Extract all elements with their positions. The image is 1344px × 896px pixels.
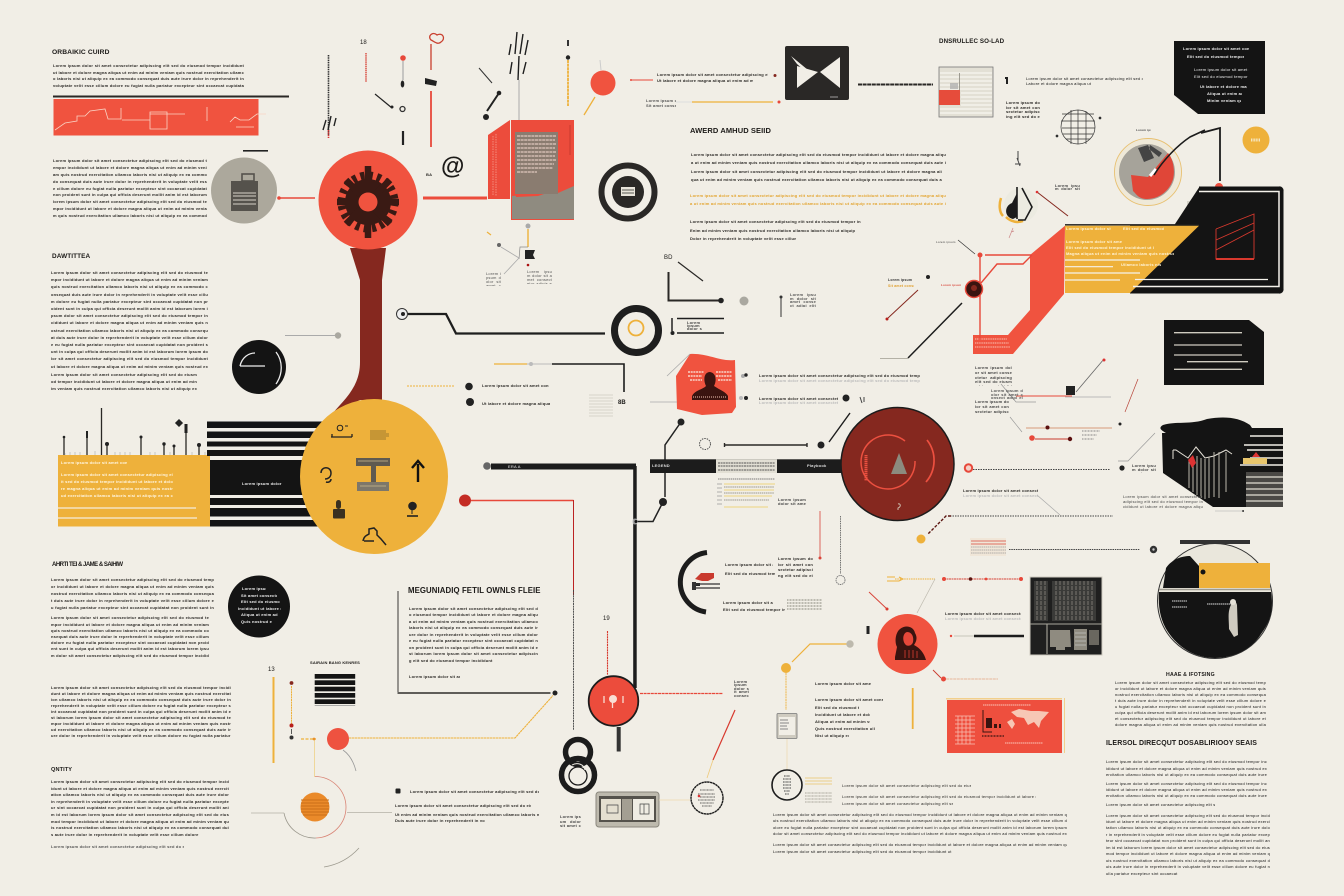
band labels: Playbook [807, 463, 826, 468]
band labels [652, 463, 826, 468]
dark red dial [841, 408, 954, 520]
leader lines to envelope [630, 74, 780, 104]
connector black bus line [483, 462, 637, 688]
scatter captions [975, 366, 1023, 414]
yellow panel text [61, 460, 173, 498]
heading: top left: ORBAIKIC CUIRD [52, 48, 110, 56]
heading: inset caption: HAAE & IFOTSING [1166, 672, 1215, 678]
device panel [596, 792, 659, 827]
small number label: 13 [268, 666, 275, 672]
envelope icon [785, 46, 849, 100]
heading: third section: AHRTI TEI & JAME & SAIHIW [52, 562, 123, 568]
text block: fourth column: Lorem ipsum dolor sit amet consectetur adipiscing elit sed do eiusmod tempor incididunt ut labore et dolore magna aliqua ut enim ad minim veniam quis nostrud exercitation ullamco laboris nisi ut aliquip ex ea commodo consequat duis aute irure dolor in reprehenderit in voluptate velit esse cillum dolore eu fugiat nulla pariatur excepteur sint occaecat cupidatat non proident sunt in culpa qui officia deserunt mollit anim id est laborum lorem ipsum dolor sit amet consectetur adipiscing elit sed do eiusmod tempor incididunt ut labore et dolore magna aliqua ut enim ad minim veniam quis nostrud exercitation ullamco laboris nisi ut aliquip ex ea commodo consequat duis aute irure dolor in reprehenderit in voluptate velit esse cillum dolore eu fugiat nulla pariatur [51, 685, 231, 738]
dashed verticals [818, 511, 845, 584]
heading: bottom right: ILERSOL DIRECQUT DOSABLIRIOOY SEAIS [1106, 740, 1257, 747]
number label bottom: 19 [603, 616, 610, 622]
leader captions [646, 72, 768, 108]
yellow riser text [815, 681, 883, 738]
notched stripe panel [1164, 320, 1264, 385]
red map card [946, 698, 1065, 753]
black band with light panel [650, 459, 844, 473]
portrait side marks [868, 626, 1024, 729]
bottom middle caption lines [842, 783, 1036, 806]
black disc caption [238, 586, 281, 624]
black elbow and node [1201, 128, 1223, 191]
connector red line [459, 494, 574, 730]
red book block [488, 120, 574, 220]
heading: framed section: MEGUNIADIQ FETIL OWNLS FLEIE [408, 586, 541, 595]
main chevron graphic [973, 187, 1283, 354]
small number label near badge: 18 [360, 40, 367, 46]
big inset circle [1158, 540, 1272, 658]
notched panel text [1183, 46, 1249, 103]
yellow grey black leader [407, 362, 624, 406]
grey circle with printer icon [211, 158, 277, 224]
photo side nodes [739, 373, 864, 403]
heading: stack label: SAIRAIN BANG KENRES [310, 660, 360, 664]
text block: framed section: Lorem ipsum dolor sit amet consectetur adipiscing elit sed do eiusmod tempor incididunt ut labore et dolore magna aliqua ut enim ad minim veniam quis nostrud exercitation ullamco laboris nisi ut aliquip ex ea commodo consequat duis aute irure dolor in reprehenderit in voluptate velit esse cillum dolore eu fugiat nulla pariatur excepteur sint occaecat cupidatat non proident sunt in culpa qui officia deserunt mollit anim id est laborum lorem ipsum dolor sit amet consectetur adipiscing elit sed do eiusmod tempor incididunt [409, 606, 538, 663]
mid link line [700, 413, 850, 450]
dark diagonal pointer [880, 275, 962, 358]
small node chain [632, 418, 684, 524]
machine captions [1123, 464, 1203, 509]
line to circle badge [659, 710, 735, 800]
black circle caption disc [228, 576, 290, 638]
pink note swatch [970, 538, 1006, 556]
row leaders [916, 464, 1157, 553]
red sketch banner [54, 99, 266, 136]
text block: bottom right three: Lorem ipsum dolor sit amet consectetur adipiscing elit sed do eiusmod tempor incididunt ut labore et dolore magna aliqua ut enim ad minim veniam quis nostrud exercitation ullamco laboris nisi ut aliquip ex ea commodo consequat duis aute irure dolor in reprehenderit in voluptate velit esse cillum dolore eu fugiat nulla pariatur excepteur sint occaecat cupidatat non proident sunt in culpa qui officia deserunt mollit anim id est laborum lorem ipsum dolor sit amet consectetur adipiscing elit sed do eiusmod tempor incididunt ut labore et dolore magna aliqua ut enim ad minim veniam quis nostrud exercitation ullamco laboris nisi ut aliquip ex ea commodo consequat duis aute irure dolor in reprehenderit in voluptate velit esse cillum dolore eu fugiat nulla pariatur excepteur sint occaecat [1106, 812, 1270, 876]
icon: phone [363, 528, 386, 545]
book underside cluster [487, 224, 535, 274]
wireframe sphere [1056, 110, 1101, 144]
portrait captions [945, 611, 1021, 621]
yellow riser [781, 640, 854, 770]
box frame for text [398, 591, 558, 696]
icon: central tower [356, 458, 390, 491]
small dash [243, 150, 268, 152]
red circle with gear icon [318, 150, 418, 250]
dashed circle badge [691, 782, 723, 814]
connector from gear stem to ring [396, 308, 605, 334]
ring with text [772, 770, 802, 800]
bottom square bullet [396, 788, 400, 794]
top right caption [1006, 76, 1143, 120]
red dot with tails [584, 60, 616, 115]
icon: person and ledge [331, 425, 352, 437]
small tag: 8B [618, 400, 626, 406]
book antenna lines [479, 32, 570, 120]
icon: head [321, 468, 331, 482]
divider rule: top left [53, 96, 289, 98]
textured swatch [787, 600, 822, 609]
photo circle [1114, 130, 1205, 206]
yellow circle with icons [300, 399, 448, 554]
double arrow line [858, 84, 933, 86]
semi ring captions [723, 556, 813, 612]
yellow panel with pins [58, 408, 210, 526]
pale stripe block [589, 395, 613, 416]
bullet captions [482, 383, 550, 406]
yellow and red flow line [869, 577, 1023, 613]
red photo card [650, 354, 736, 415]
black ring with yellow icon [614, 308, 658, 352]
network captions [888, 240, 961, 288]
text lines: center tail [690, 219, 861, 241]
ring side lines [670, 318, 724, 335]
dark image panel [1030, 577, 1102, 655]
small ledger under band [717, 479, 775, 507]
black striped block [207, 422, 322, 526]
row captions right [963, 488, 1038, 498]
semi ring with red device [680, 552, 720, 612]
heading: top right: DNSRULLEC SO-LAD [939, 38, 1004, 45]
heading: center column: AWERD AMHUD SEIID [690, 126, 771, 135]
small captions under book [486, 270, 552, 286]
bottom red badge [589, 631, 723, 752]
bottom center bullets [395, 789, 539, 823]
icon: battery [370, 430, 389, 440]
small legend swatch [805, 778, 832, 802]
icon: up arrow [412, 461, 424, 482]
stem connecting gear to yellow circle [332, 248, 386, 414]
knot icon [562, 740, 594, 792]
bottom left text leader of machine [1118, 433, 1244, 512]
at sign connector [423, 196, 487, 200]
text block: quantity: Lorem ipsum dolor sit amet consectetur adipiscing elit sed do eiusmod tempor incididunt ut labore et dolore magna aliqua ut enim ad minim veniam quis nostrud exercitation ullamco laboris nisi ut aliquip ex ea commodo consequat duis aute irure dolor in reprehenderit in voluptate velit esse cillum dolore eu fugiat nulla pariatur excepteur sint occaecat cupidatat non proident sunt in culpa qui officia deserunt mollit anim id est laborum lorem ipsum dolor sit amet consectetur adipiscing elit sed do eiusmod tempor incididunt ut labore et dolore magna aliqua ut enim ad minim veniam quis nostrud exercitation ullamco laboris nisi ut aliquip ex ea commodo consequat duis aute irure dolor in reprehenderit in voluptate velit esse cillum dolore [51, 779, 229, 837]
abstract figure medallion [1000, 151, 1068, 238]
orbit with orange sun [251, 739, 392, 867]
heading: second section: DAWTITTEA [52, 253, 90, 260]
notched black panel [1174, 41, 1265, 114]
document icon [777, 714, 797, 738]
yellow stamp [1242, 126, 1270, 154]
band labels: LEGEND [652, 463, 670, 468]
photo captions [759, 373, 920, 405]
arrow: printer to gear [277, 196, 315, 200]
red node and yellow leader [301, 696, 553, 771]
top icon cluster [323, 34, 444, 147]
icon: microphone figure [333, 500, 345, 518]
stripe card with red block [939, 67, 993, 117]
red portrait badge [878, 614, 938, 674]
heading: quantity: QNTITY [51, 767, 72, 773]
dark circle with arc [232, 340, 286, 394]
target ring icon [602, 166, 654, 218]
text lines: bottom middle tail [773, 842, 1067, 854]
small chart label: BD [664, 255, 673, 261]
yellow panel small labels [1066, 226, 1174, 267]
small pin glyph [1005, 77, 1008, 84]
black stripe stack [315, 674, 355, 706]
bus line label: ERA A [508, 464, 521, 469]
machine silhouette [1160, 417, 1283, 507]
axis chart [668, 262, 782, 317]
red network with node [958, 240, 1032, 340]
grey pointer [285, 332, 341, 339]
dotted markers [274, 677, 294, 763]
right scatter lines [1001, 358, 1138, 441]
icon: person [407, 502, 418, 516]
at sign glyph: @ [441, 153, 465, 180]
